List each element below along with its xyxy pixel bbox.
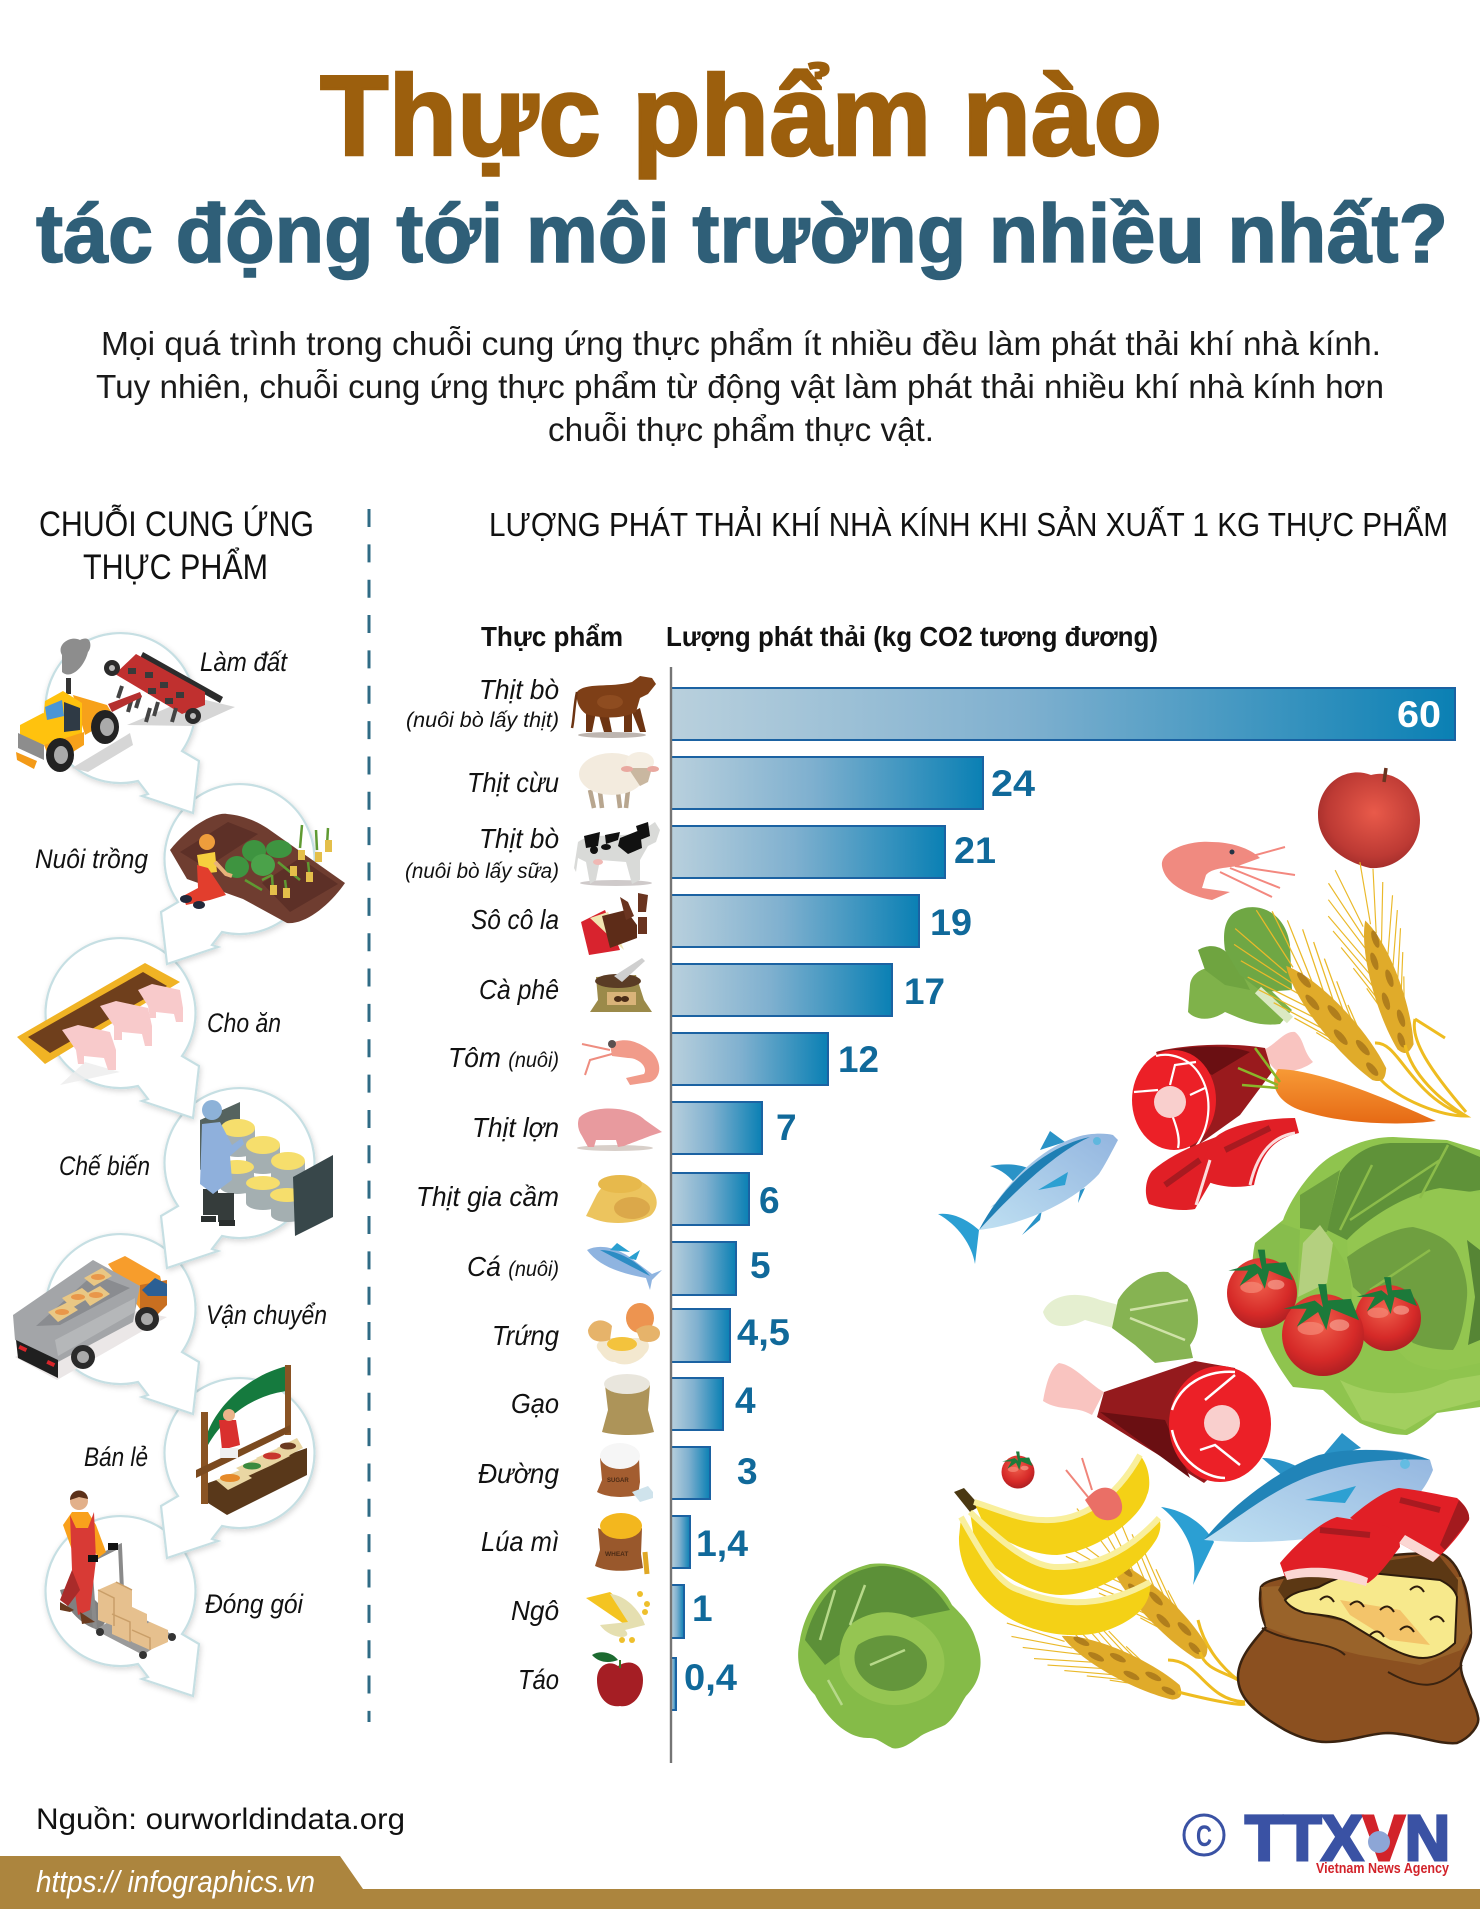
logo: TTXVN: Vietnam News Agency — [1316, 1860, 1450, 1877]
food labels: Tôm (nuôi) — [448, 1042, 559, 1073]
rib chops on sack — [1280, 1488, 1469, 1586]
icon: dairy cow — [574, 822, 660, 886]
icon: worker with boxes — [60, 1490, 176, 1659]
icon: truck — [13, 1256, 167, 1380]
icon: pigs at feed trough — [17, 963, 183, 1085]
ham 2 — [1043, 1361, 1271, 1483]
food labels: Lúa mì — [481, 1526, 559, 1557]
bar values: 3 — [737, 1451, 758, 1492]
small cabbage — [798, 1563, 981, 1748]
logo: TTXVN: TTXVN — [1245, 1802, 1450, 1874]
small tomato and shrimp — [1002, 1452, 1122, 1520]
shrimp — [1162, 842, 1295, 900]
food labels: Đường — [478, 1458, 559, 1489]
bar values: 17 — [904, 971, 945, 1012]
source: Nguồn: ourworldindata.org — [36, 1803, 405, 1836]
bar values — [684, 694, 1441, 1698]
bar values: 1 — [692, 1588, 713, 1629]
step 3 bubble: Cho ăn — [17, 938, 281, 1118]
bar values: 1,4 — [696, 1523, 748, 1564]
icon: rice sack — [602, 1374, 654, 1435]
bar values: 60 — [1397, 694, 1441, 735]
intro text: Mọi quá trình trong chuỗi cung ứng thực phẩm ít nhiều đều làm phát thải khí nhà kính. — [101, 325, 1381, 362]
panel: food illustration — [798, 768, 1480, 1748]
large cabbage — [1252, 1137, 1480, 1435]
bar values: 12 — [838, 1039, 879, 1080]
food labels: Cá (nuôi) — [467, 1251, 559, 1282]
bar values: 7 — [776, 1107, 797, 1148]
apple — [1318, 768, 1420, 868]
food labels: Cà phê — [479, 974, 559, 1005]
copyright mark — [1184, 1815, 1224, 1855]
bananas — [954, 1455, 1160, 1635]
food labels: Thịt cừu — [467, 767, 559, 798]
food labels: Thịt gia cầm — [416, 1181, 559, 1212]
intro text: chuỗi thực phẩm thực vật. — [548, 411, 934, 448]
title line 2: tác động tới môi trường nhiều nhất? — [36, 187, 1448, 280]
wheat stalks — [1218, 856, 1466, 1116]
bar values: 0,4 — [684, 1657, 737, 1698]
icon: shrimp — [582, 1040, 659, 1085]
copyright mark: C — [1196, 1820, 1212, 1853]
heading: supply chain: THỰC PHẨM — [83, 547, 268, 587]
rib chops — [1146, 1118, 1299, 1210]
icon: field and farmer — [170, 814, 345, 923]
icon: corn — [586, 1591, 650, 1643]
food labels: (nuôi bò lấy sữa) — [405, 860, 559, 883]
icon: fish — [587, 1243, 662, 1290]
food labels: Sô cô la — [471, 904, 559, 935]
icon: apple — [592, 1652, 643, 1706]
food labels: Thịt bò — [479, 823, 559, 854]
icon: tractor and cultivator — [16, 639, 235, 772]
heading: supply chain — [39, 504, 314, 587]
bar values: 6 — [759, 1180, 780, 1221]
food labels: Trứng — [492, 1320, 559, 1351]
chart column headers: Lượng phát thải (kg CO2 tương đương) — [666, 621, 1158, 652]
food labels: Gạo — [511, 1388, 559, 1419]
bok choy 2 — [1043, 1272, 1198, 1363]
bar values: 24 — [991, 763, 1035, 804]
food labels — [405, 674, 559, 1695]
icon: chocolate bar — [581, 893, 648, 955]
icon: wheat sack: WHEAT — [605, 1551, 628, 1558]
heading: supply chain: CHUỖI CUNG ỨNG — [39, 504, 314, 544]
icon: sheep — [579, 752, 659, 808]
icon: poultry — [586, 1175, 657, 1223]
food labels: Thịt lợn — [472, 1112, 559, 1143]
panel: supply chain flow — [13, 633, 345, 1696]
label: Làm đất — [200, 647, 288, 677]
wheat bottom — [998, 1494, 1245, 1723]
label: Nuôi trồng — [35, 844, 148, 874]
bar values: 21 — [954, 830, 996, 871]
bar values: 4,5 — [737, 1312, 790, 1353]
bar values: 4 — [735, 1380, 756, 1421]
icon: market stall — [196, 1365, 307, 1515]
food labels: Táo — [518, 1664, 559, 1695]
carrot — [1238, 1048, 1436, 1123]
step 7 bubble: Đóng gói — [46, 1490, 304, 1696]
step 6 bubble: Bán lẻ — [84, 1365, 314, 1558]
ham — [1132, 1032, 1313, 1150]
footer bar — [0, 1856, 1480, 1909]
food labels: Thịt bò — [479, 674, 559, 705]
label: Vận chuyển — [206, 1300, 327, 1330]
food labels: Ngô — [511, 1595, 559, 1626]
icon: sugar sack — [597, 1443, 653, 1502]
bar values: 5 — [750, 1245, 771, 1286]
step 4 bubble: Chế biến — [59, 1088, 333, 1268]
label: Chế biến — [59, 1151, 150, 1181]
icon: sugar sack: SUGAR — [607, 1478, 629, 1484]
chart column headers — [481, 621, 1158, 652]
step 2 bubble: Nuôi trồng — [35, 784, 345, 964]
bar values: 19 — [930, 902, 972, 943]
icon: wheat sack — [595, 1513, 647, 1574]
step 1 bubble: Làm đất — [16, 633, 288, 813]
tuna fish — [938, 1131, 1118, 1264]
bok choy — [1188, 907, 1292, 1025]
chart column headers: Thực phẩm — [481, 621, 623, 652]
icon: beef cow — [572, 676, 656, 738]
title line 1: Thực phẩm nào — [320, 53, 1162, 180]
label: Cho ăn — [207, 1008, 281, 1038]
intro text: Tuy nhiên, chuỗi cung ứng thực phẩm từ động vật làm phát thải nhiều khí nhà kính hơn — [96, 368, 1384, 405]
grain sack — [1238, 1553, 1478, 1743]
icon: pig — [577, 1108, 662, 1151]
tuna fish 2 — [1161, 1433, 1433, 1585]
title — [36, 53, 1448, 280]
website: https:// infographics.vn — [36, 1864, 315, 1899]
tomatoes — [1227, 1250, 1421, 1376]
bar chart — [671, 667, 1455, 1763]
icon: coffee sack — [590, 958, 652, 1012]
food labels: (nuôi bò lấy thịt) — [406, 709, 559, 732]
icon: food processing — [200, 1100, 333, 1236]
step 5 bubble: Vận chuyển — [13, 1234, 327, 1414]
icon: eggs — [588, 1303, 660, 1364]
label: Đóng gói — [205, 1589, 304, 1619]
label: Bán lẻ — [84, 1442, 148, 1472]
intro text — [96, 325, 1384, 448]
